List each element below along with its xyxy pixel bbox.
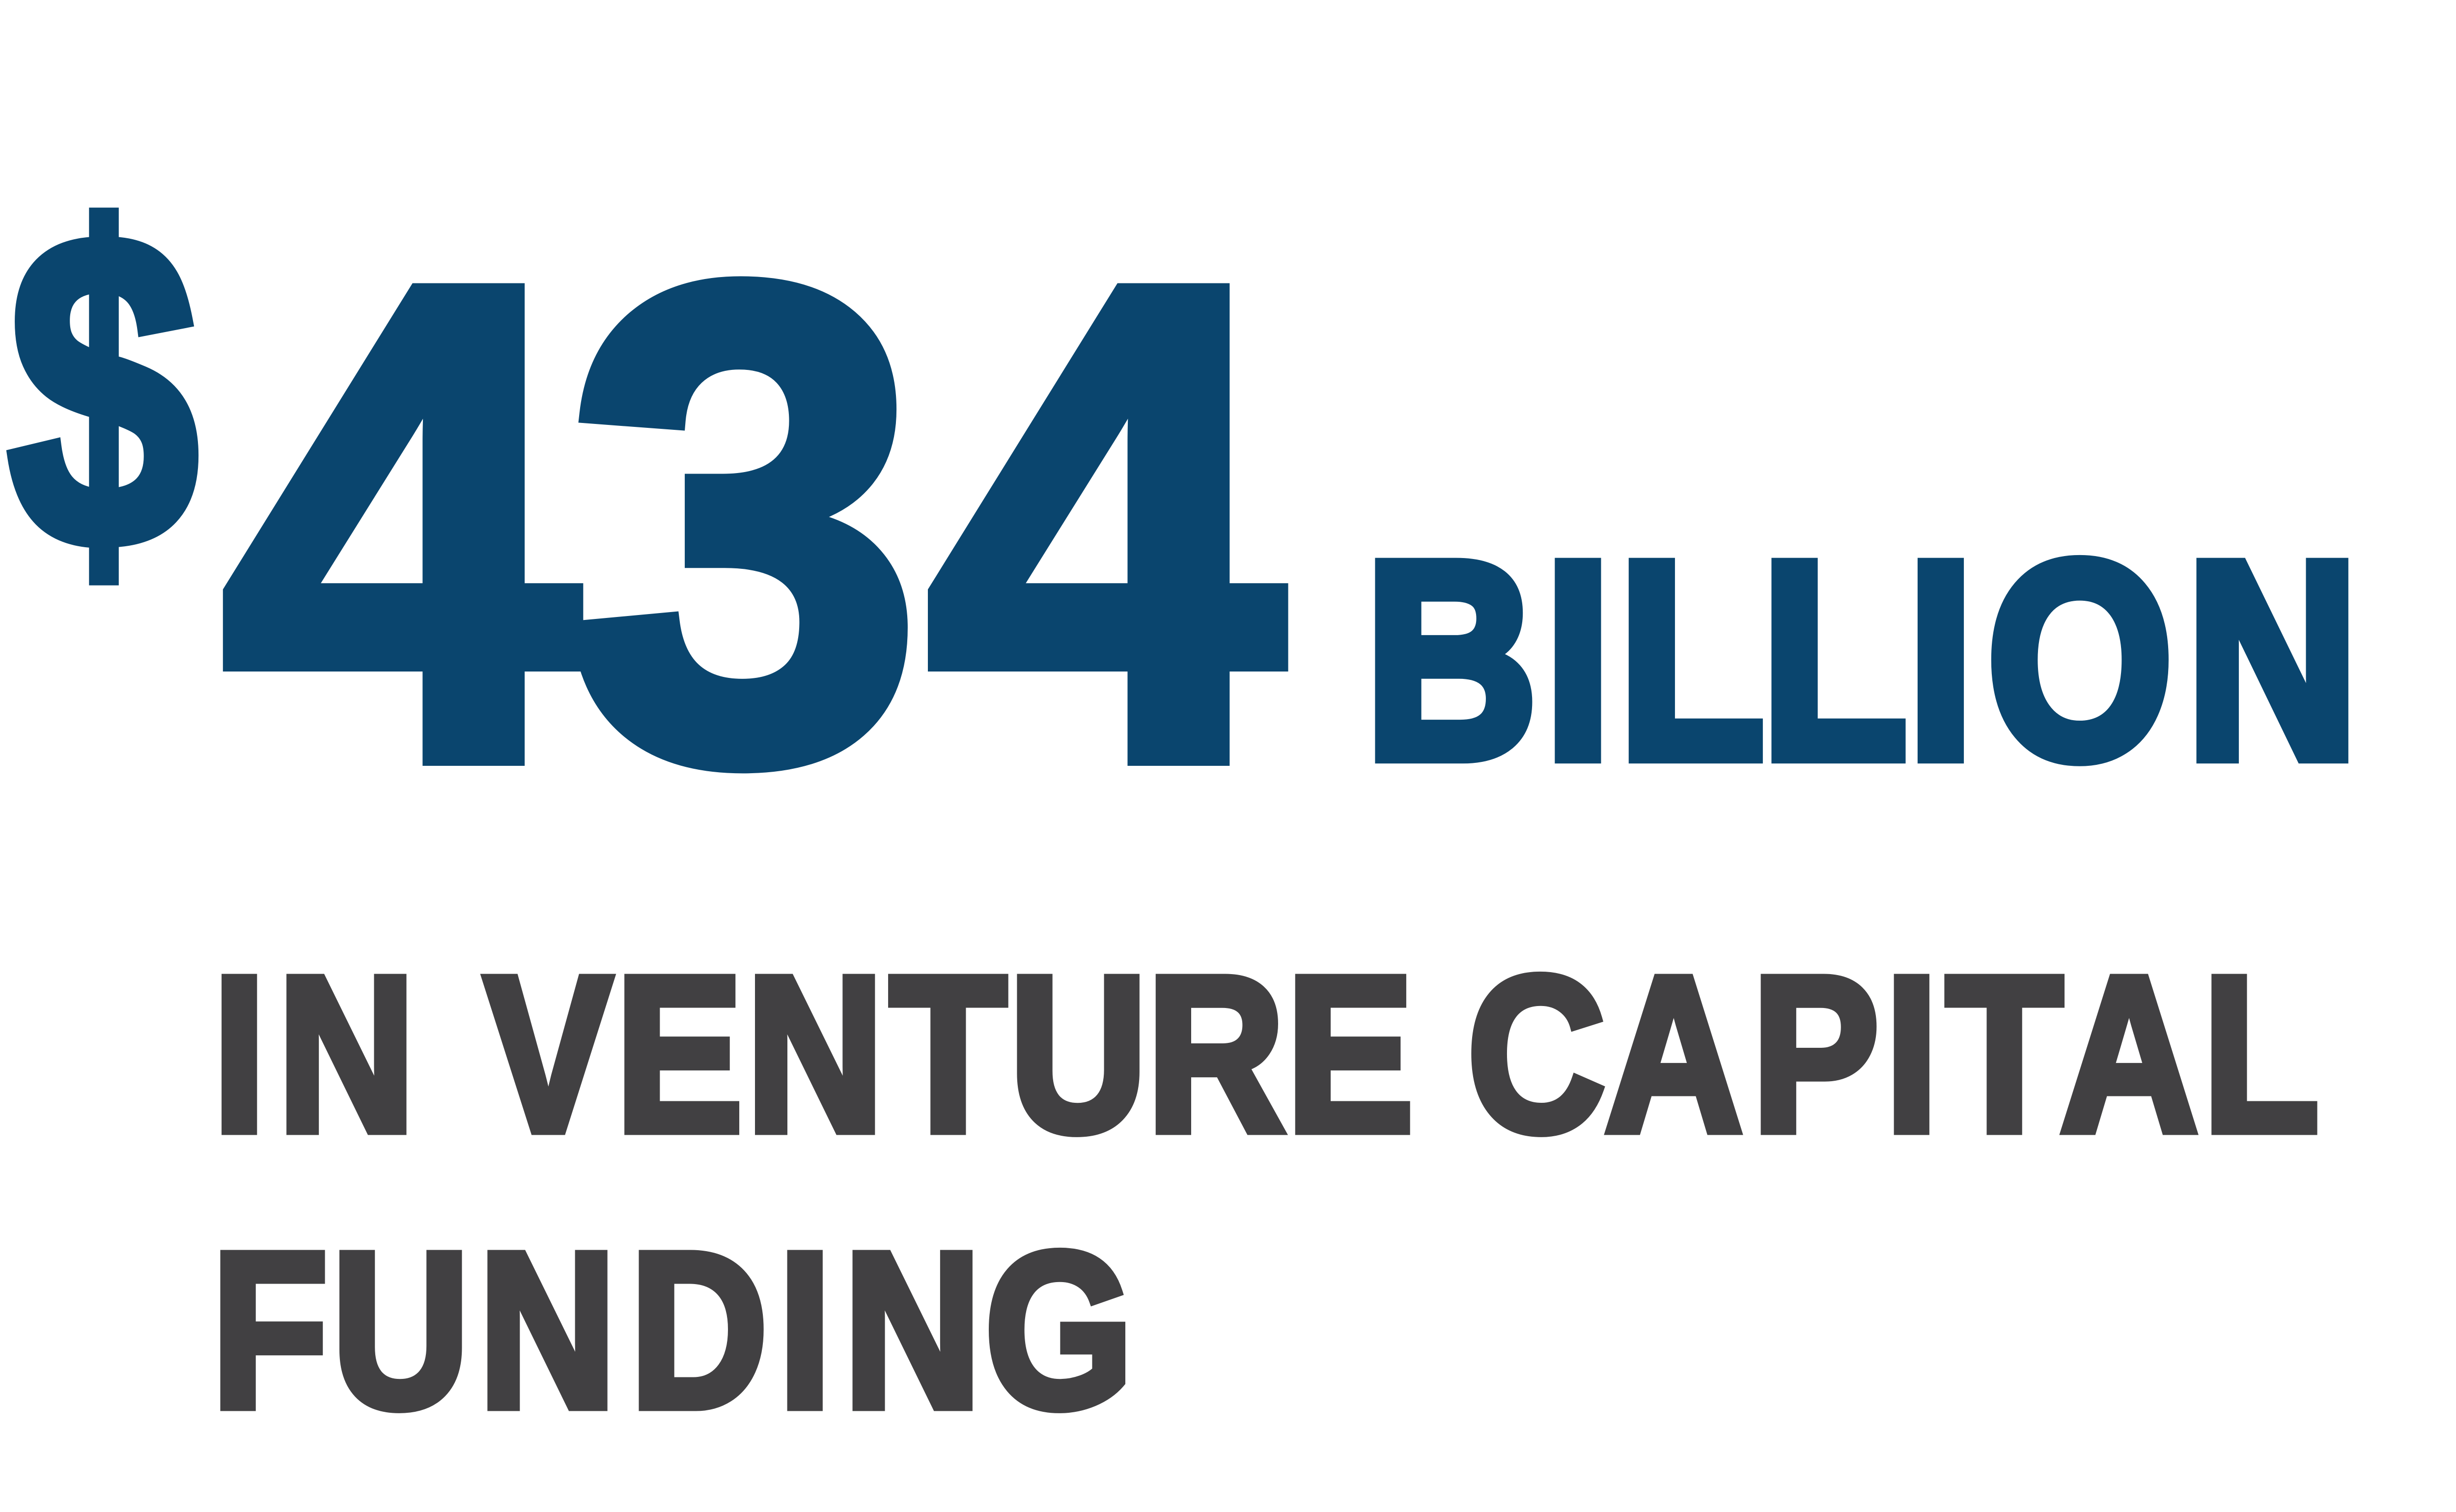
dollar sign: $ xyxy=(9,143,197,639)
description line 1: IN VENTURE CAPITAL xyxy=(213,931,2319,1177)
headline number 434: 434 xyxy=(223,147,1286,899)
description line 2: FUNDING xyxy=(212,1207,1133,1454)
unit label: BILLION: BILLION xyxy=(1365,505,2358,816)
